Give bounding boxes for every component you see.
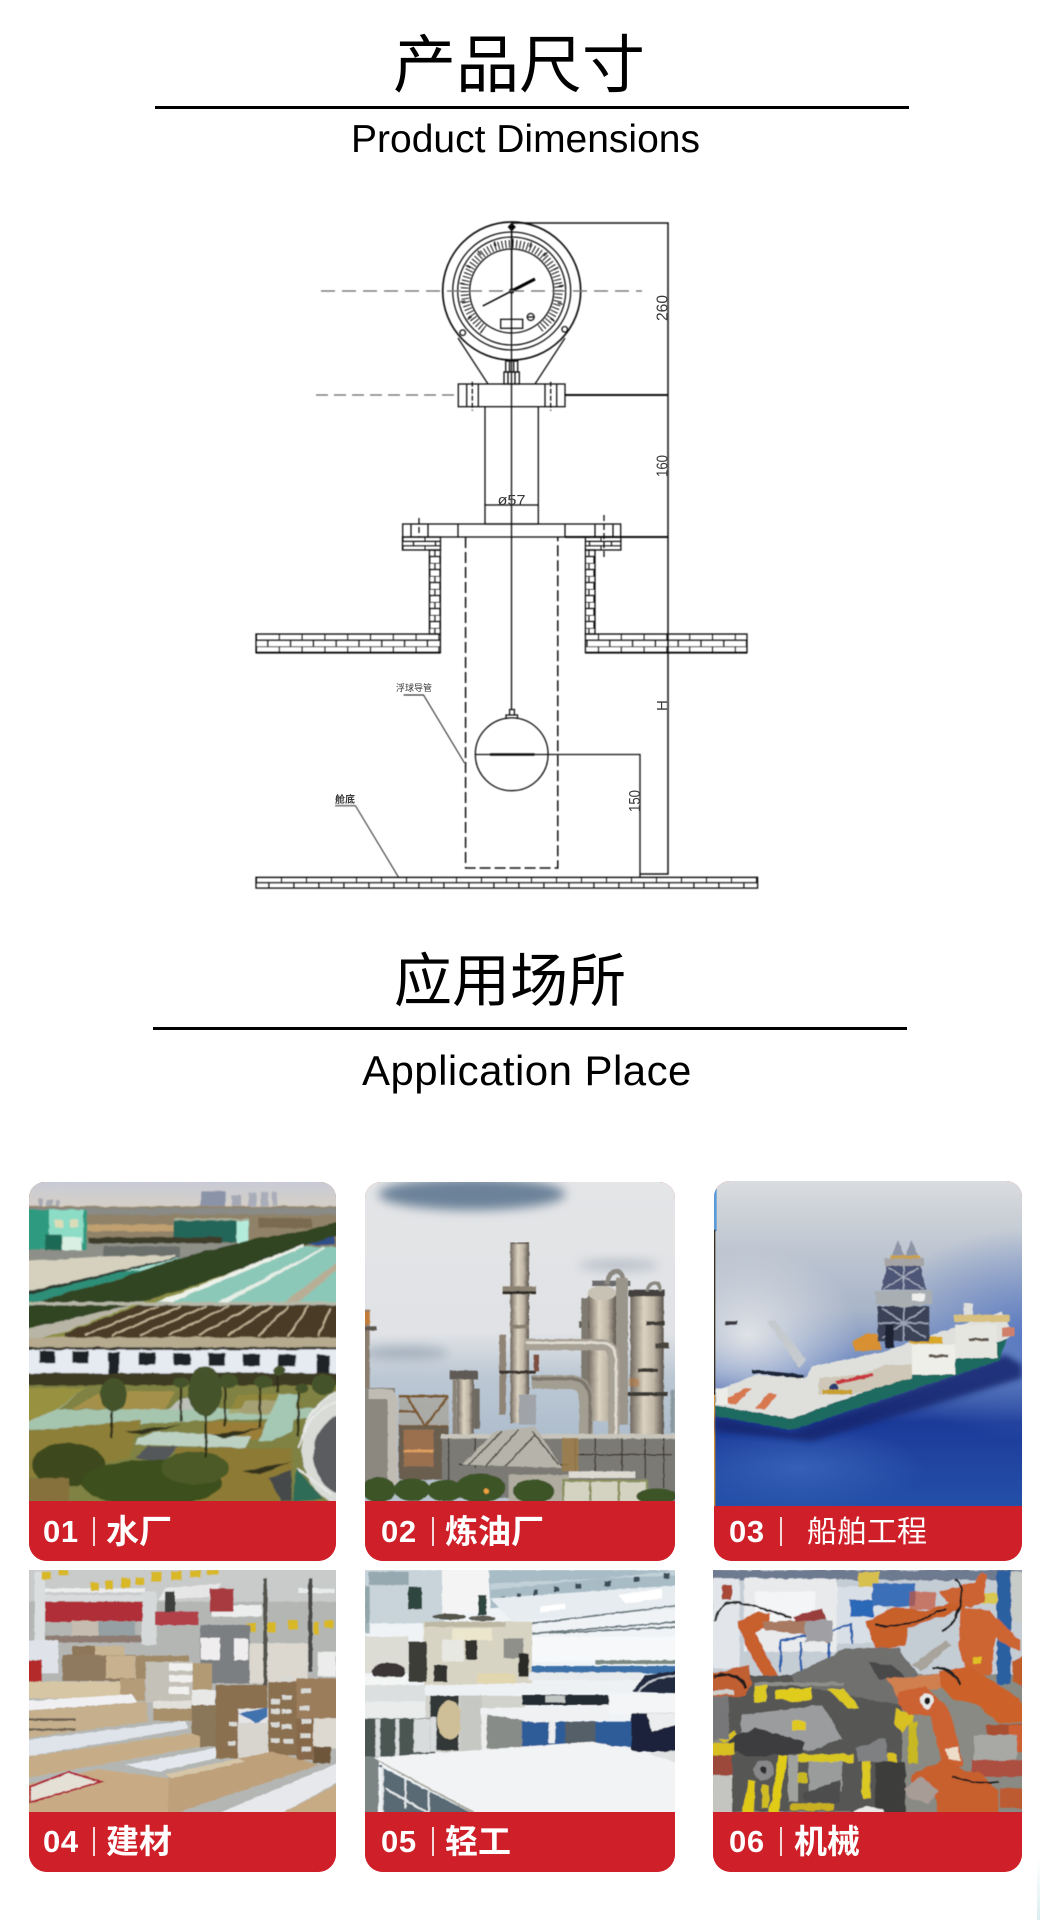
dimension labels: 舱底 — [335, 793, 355, 806]
gauge dial — [443, 222, 581, 360]
filter beds — [65, 1305, 345, 1337]
upper left robot — [715, 1602, 792, 1622]
upper right robots — [865, 1598, 965, 1650]
photo: materials warehouse — [29, 1570, 336, 1812]
shrubs — [32, 1443, 105, 1486]
label text: 水厂 — [106, 1513, 172, 1550]
right main robot — [887, 1675, 945, 1697]
plant base — [399, 1426, 449, 1480]
deck — [715, 1311, 1014, 1419]
technical drawing: gauge dimensions — [254, 220, 760, 890]
label band: 06 机械 — [713, 1812, 1022, 1872]
signs — [42, 1570, 334, 1634]
label band: 05 轻工 — [365, 1812, 675, 1872]
label divider — [93, 1517, 95, 1546]
card 06: machinery — [713, 1570, 1022, 1872]
left cabinets — [362, 1702, 425, 1718]
leader lines — [335, 695, 464, 878]
dimension labels: 150 — [627, 790, 644, 812]
dimension labels: ø57 — [498, 492, 526, 509]
label number: 01 — [43, 1514, 79, 1549]
trees — [112, 1375, 298, 1458]
label number: 03 — [729, 1514, 765, 1549]
label divider — [780, 1517, 782, 1546]
label band: 03 船舶工程 — [714, 1506, 1022, 1561]
label divider — [780, 1827, 782, 1856]
subtitle: Product Dimensions: Product Dimensions — [351, 118, 700, 161]
heading rule: product dimensions — [155, 106, 909, 109]
big tower — [588, 1293, 616, 1421]
round tank — [302, 1391, 388, 1505]
title: 应用场所: 应用场所 — [394, 949, 626, 1014]
label band: 04 建材 — [29, 1812, 336, 1872]
label divider — [93, 1827, 95, 1856]
lawn paths — [25, 1385, 345, 1501]
card 02: refinery — [365, 1182, 675, 1561]
tank bottom floor — [256, 877, 758, 888]
photo: garment factory — [365, 1570, 675, 1812]
photo: water plant — [29, 1182, 336, 1501]
right boxes — [216, 1685, 267, 1758]
photo: refinery — [365, 1182, 675, 1501]
photo: offshore drilling ship — [714, 1181, 1022, 1506]
label text: 船舶工程 — [807, 1516, 927, 1549]
title: 产品尺寸: 产品尺寸 — [393, 31, 645, 101]
card 05: light industry — [365, 1570, 675, 1872]
dimension labels — [335, 295, 672, 812]
label band: 01 水厂 — [29, 1501, 336, 1561]
label number: 05 — [381, 1824, 417, 1859]
dimension labels: 260 — [654, 295, 672, 321]
main stack — [510, 1243, 529, 1423]
label number: 06 — [729, 1824, 765, 1859]
dimension labels: 160 — [654, 455, 672, 477]
clear basins — [152, 1246, 345, 1303]
hull — [715, 1339, 1007, 1430]
pipes — [525, 1345, 614, 1471]
tables — [425, 1680, 639, 1696]
white building — [25, 1350, 345, 1374]
stacked boxes — [62, 1655, 135, 1681]
label divider — [432, 1827, 434, 1856]
sewing machine — [424, 1622, 532, 1685]
left lower robot — [712, 1665, 751, 1697]
green building — [25, 1210, 87, 1250]
heading rule: application place — [152, 1027, 906, 1030]
derrick — [878, 1306, 929, 1341]
dimension labels: 浮球导管 — [396, 682, 432, 693]
label text: 建材 — [106, 1823, 172, 1860]
left road band — [25, 1255, 175, 1292]
card 01: water plant — [29, 1182, 336, 1561]
guide tube and float ball — [466, 224, 640, 877]
center car frame — [729, 1675, 902, 1812]
main table — [374, 1742, 682, 1815]
trees — [362, 1473, 678, 1504]
subtitle: Application Place: Application Place — [362, 1047, 692, 1094]
door and boards — [200, 1625, 250, 1683]
base flange — [403, 515, 621, 560]
foreground — [25, 1769, 168, 1813]
small tower — [457, 1376, 474, 1435]
photo: robot assembly line — [713, 1570, 1022, 1812]
label divider — [432, 1517, 434, 1546]
card 03: ship engineering — [714, 1181, 1022, 1561]
brick shaft walls — [256, 537, 747, 653]
label text: 机械 — [794, 1823, 860, 1860]
label text: 炼油厂 — [445, 1513, 544, 1550]
dimension lines — [316, 223, 668, 874]
tree line — [25, 1220, 345, 1329]
card 04: building materials — [29, 1570, 336, 1872]
gauge mount and flange — [458, 338, 565, 524]
label number: 02 — [381, 1514, 417, 1549]
label band: 02 炼油厂 — [365, 1501, 675, 1561]
label text: 轻工 — [445, 1823, 511, 1860]
dimension labels: H — [654, 700, 671, 711]
right tower — [630, 1295, 664, 1436]
left structure — [364, 1310, 370, 1410]
label number: 04 — [43, 1824, 79, 1859]
